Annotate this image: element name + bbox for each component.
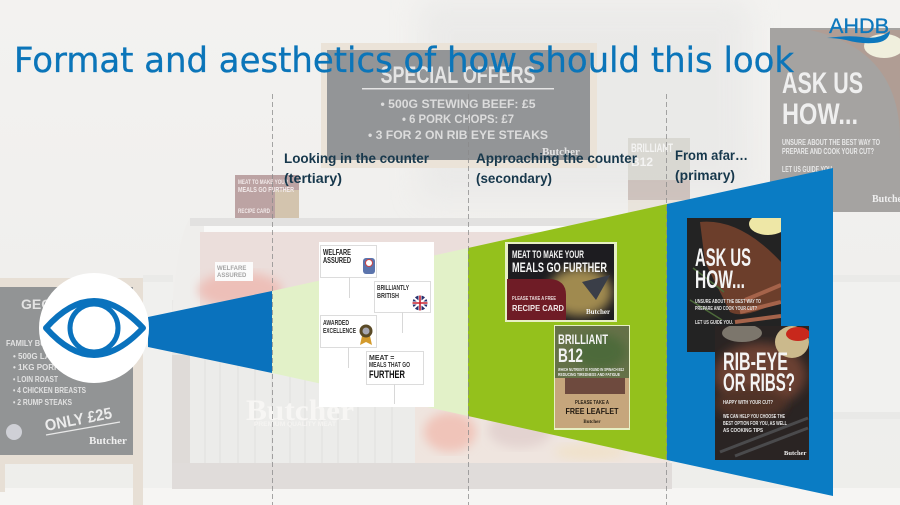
background: counter: PREMIUM QUALITY MEAT <box>254 422 336 428</box>
background: family bundle A-board: • 500G LAMB <box>13 352 63 361</box>
poster: brilliant B12 leaflet: FREE LEAFLET <box>566 407 619 416</box>
background: family bundle A-board: ONLY £25 <box>44 405 114 435</box>
poster: recipe card <box>505 242 617 322</box>
wedge: eye beam blue <box>148 291 272 373</box>
poster: rib-eye or ribs: Butcher <box>784 450 806 457</box>
heading: approaching the counter (secondary): (secondary) <box>476 171 552 186</box>
label: meat = meals that go further: FURTHER <box>369 369 405 381</box>
background: specials chalkboard: • 500G STEWING BEEF: £5 <box>380 97 536 111</box>
poster: recipe card: MEAT TO MAKE YOUR <box>512 249 584 261</box>
poster: brilliant B12 leaflet: B12 <box>558 346 583 367</box>
background: B12 counter poster: B12 <box>631 155 653 169</box>
poster: rib-eye or ribs: HAPPY WITH YOUR CUT? <box>723 400 773 406</box>
wedge: secondary green <box>468 204 667 460</box>
background: family bundle A-board: • 1KG PORK <box>13 363 60 372</box>
label: awarded excellence <box>320 316 376 368</box>
background: B12 counter poster: BRILLIANT <box>631 141 673 155</box>
background: ask us how wall poster: LET US GUIDE YOU <box>782 165 832 174</box>
poster: rib-eye or ribs <box>714 324 810 460</box>
label: brilliantly british <box>374 282 430 333</box>
poster: brilliant B12 leaflet: PLEASE TAKE A <box>575 400 609 406</box>
poster: ask us how: PREPARE AND COOK YOUR CUT? <box>695 306 757 312</box>
background: family bundle A-board: • 2 RUMP STEAKS <box>13 398 73 407</box>
poster: brilliant B12 leaflet: REDUCING TIREDNESS AND FATIGUE <box>558 372 620 377</box>
poster: ask us how: ASK US <box>695 244 751 272</box>
label: meat = meals that go further: MEAT = <box>369 355 394 362</box>
background: wall panelling <box>143 275 900 490</box>
poster: brilliant B12 leaflet <box>554 325 630 430</box>
label: awarded excellence: AWARDED <box>323 320 349 327</box>
poster: ask us how <box>687 213 787 352</box>
label: brilliantly british: BRITISH <box>377 293 399 300</box>
background: family bundle A-board: • 4 CHICKEN BREASTS <box>13 386 87 395</box>
background: family bundle A-board <box>0 278 143 505</box>
background: counter: ASSURED <box>217 273 247 279</box>
background: small recipe poster: MEAT TO MAKE YOUR <box>238 180 289 186</box>
label: welfare assured: WELFARE <box>323 248 351 257</box>
background: ask us how wall poster: HOW... <box>782 98 858 131</box>
poster: rib-eye or ribs: RIB-EYE <box>723 348 788 376</box>
poster: ask us how: HOW... <box>695 266 745 294</box>
poster: rib-eye or ribs: BEST OPTION FOR YOU, AS WELL <box>723 421 787 427</box>
background: small recipe poster: MEALS GO FURTHER <box>238 187 294 194</box>
background: counter: WELFARE <box>217 266 246 272</box>
heading: looking in the counter (tertiary): (tertiary) <box>284 171 342 186</box>
background: counter: Butcher <box>246 394 354 427</box>
background: specials chalkboard <box>321 43 597 168</box>
label: awarded excellence: EXCELLENCE <box>323 328 356 335</box>
poster: recipe card: RECIPE CARD <box>512 303 564 313</box>
poster: recipe card: Butcher <box>586 308 610 316</box>
background: B12 counter poster <box>628 138 690 220</box>
background: small recipe poster <box>235 175 299 218</box>
background: specials chalkboard: Butcher <box>542 146 580 158</box>
poster: ask us how: LET US GUIDE YOU. <box>695 320 733 326</box>
background: family bundle A-board: GEORGE <box>21 296 82 312</box>
poster: rib-eye or ribs: WE CAN HELP YOU CHOOSE THE <box>723 414 785 420</box>
heading: looking in the counter (tertiary): Looking in the counter <box>284 151 430 166</box>
poster: brilliant B12 leaflet: BRILLIANT <box>558 331 608 347</box>
poster: brilliant B12 leaflet: Butcher <box>583 420 601 425</box>
label: brilliantly british: BRILLIANTLY <box>377 285 409 292</box>
wedge: primary blue <box>667 168 833 496</box>
background: ask us how wall poster: ASK US <box>782 67 863 100</box>
background: counter <box>172 218 672 489</box>
label: welfare assured: ASSURED <box>323 256 351 265</box>
poster: ask us how: UNSURE ABOUT THE BEST WAY TO <box>695 299 761 305</box>
background: family bundle A-board: Butcher <box>89 435 127 447</box>
background: small recipe poster: RECIPE CARD <box>238 209 271 215</box>
background: specials chalkboard: SPECIAL OFFERS <box>380 62 536 89</box>
poster: rib-eye or ribs: OR RIBS? <box>723 369 795 397</box>
background: family bundle A-board: • LOIN ROAST <box>13 375 58 384</box>
label: welfare assured <box>320 246 376 298</box>
poster: recipe card: PLEASE TAKE A FREE <box>512 296 556 302</box>
heading: approaching the counter (secondary): Approaching the counter <box>476 151 638 166</box>
poster: recipe card: MEALS GO FURTHER <box>512 259 607 275</box>
title: Format and aesthetics of how should this look <box>14 41 795 81</box>
label: meat = meals that go further: MEALS THAT GO <box>369 362 410 369</box>
background: family bundle A-board: FAMILY BUNDLE <box>6 339 67 348</box>
icon: eye in white circle <box>39 273 149 383</box>
icon: union flag <box>412 296 428 310</box>
wedge: tertiary light green <box>272 248 468 416</box>
poster: brilliant B12 leaflet: WHICH NUTRIENT IS FOUND IN SPINACH B12 <box>558 367 624 372</box>
background: specials chalkboard: • 3 FOR 2 ON RIB EYE STEAKS <box>368 128 548 142</box>
background: floor <box>0 488 900 505</box>
heading: from afar (primary): From afar… <box>675 148 748 163</box>
poster: rib-eye or ribs: AS COOKING TIPS <box>723 428 763 434</box>
background: ask us how wall poster <box>770 28 900 212</box>
icon: rosette <box>360 324 372 345</box>
white panel: tertiary counter labels <box>319 242 434 407</box>
background: specials chalkboard: • 6 PORK CHOPS: £7 <box>402 112 514 126</box>
heading: from afar (primary): (primary) <box>675 168 735 183</box>
logo: AHDB: AHDB <box>829 15 889 38</box>
label: meat = meals that go further <box>366 352 424 404</box>
